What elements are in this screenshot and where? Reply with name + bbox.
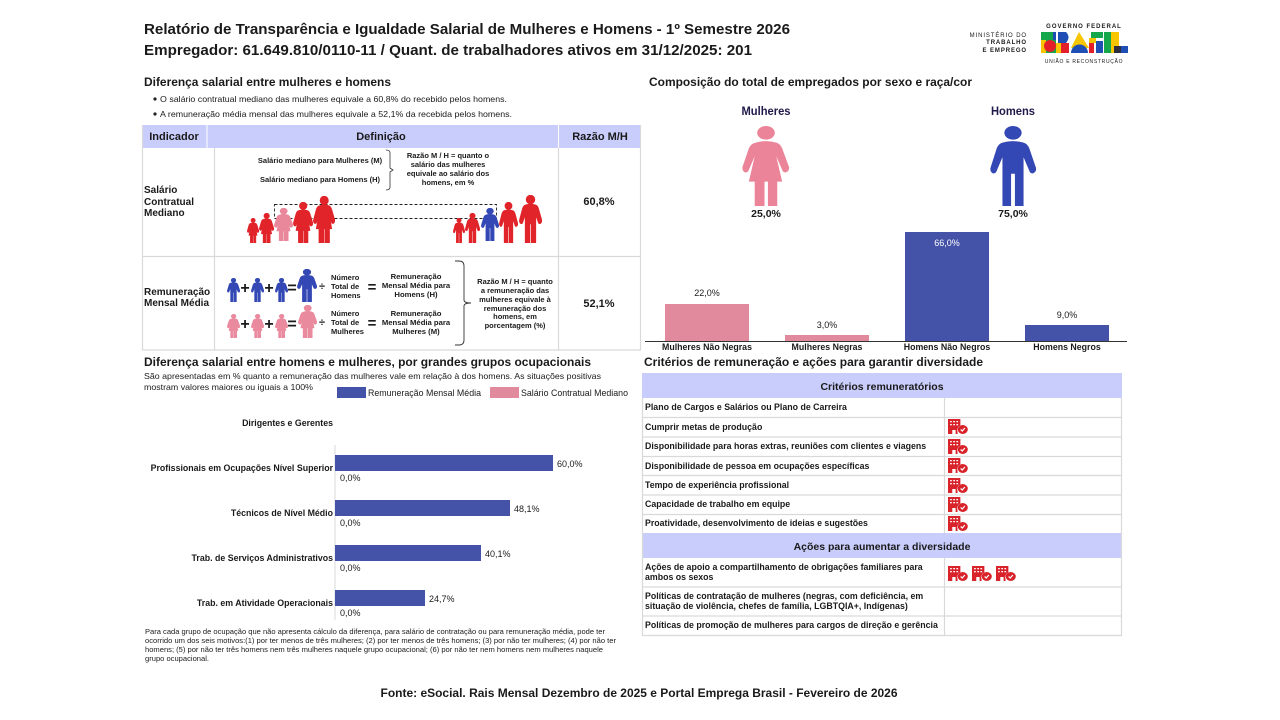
definition: salário mediano: salário das mulheres xyxy=(411,160,485,169)
bar chart: composição: Mulheres Não Negras xyxy=(662,342,752,352)
text block: explicação: São apresentadas em % quanto a remuneração das mulheres vale em relação à dos homens. As situações positivas xyxy=(144,371,601,381)
bar chart: grupos ocupacionais: 24,7% xyxy=(429,594,455,604)
formula: mulheres: ÷ xyxy=(319,317,325,329)
list: critérios: Disponibilidade para horas extras, reuniões com clientes e viagens xyxy=(645,441,926,451)
bar chart: grupos ocupacionais xyxy=(151,418,583,620)
footnote xyxy=(145,627,616,663)
list: ações: ambos os sexos xyxy=(645,572,714,582)
heading: critérios: Critérios de remuneração e ações para garantir diversidade xyxy=(644,355,983,369)
formula: homens: = xyxy=(368,279,377,296)
definition: salário mediano: Salário mediano para Mulheres (M) xyxy=(258,156,383,165)
list: ações: situação de violência, chefes de família, LGBTQIA+, Indígenas) xyxy=(645,601,908,611)
panel: mulheres xyxy=(742,106,790,220)
list: critérios: Disponibilidade de pessoa em ocupações específicas xyxy=(645,461,870,471)
bar chart: composição: Homens Negros xyxy=(1033,342,1101,352)
brace and definition: remuneração: Razão M / H = quanto xyxy=(477,277,553,286)
row label: Salário Contratual Mediano: Contratual xyxy=(144,197,194,208)
formula: mulheres: Número xyxy=(331,309,360,318)
bar chart: grupos ocupacionais: 0,0% xyxy=(340,563,361,573)
list: ações: Ações de apoio a compartilhamento de obrigações familiares para xyxy=(645,562,923,572)
panel: mulheres: 25,0% xyxy=(751,208,782,220)
icons: ações xyxy=(948,566,1016,581)
formula: homens: = xyxy=(287,280,297,297)
logo: Ministério do Trabalho e Emprego: TRABALHO xyxy=(986,40,1027,46)
formula: mulheres: + xyxy=(264,316,274,333)
list: critérios: Plano de Cargos e Salários ou Plano de Carreira xyxy=(645,402,847,412)
bar chart: grupos ocupacionais: Trab. de Serviços Administrativos xyxy=(192,553,333,563)
bar chart: grupos ocupacionais: Trab. em Atividade Operacionais xyxy=(197,598,333,608)
definition: salário mediano xyxy=(258,150,490,190)
legend: Remuneração Mensal Média xyxy=(368,388,482,399)
heading: diferença por grupos ocupacionais: Diferença salarial entre homens e mulheres, por grandes grupos ocupacionais xyxy=(144,355,591,369)
title: Relatório de Transparência e Igualdade Salarial de Mulheres e Homens - 1º Semestre 2026 xyxy=(144,22,790,38)
formula: mulheres: + xyxy=(240,316,250,333)
footnote: ocorrido um dos seis motivos:(1) por ter menos de três mulheres; (2) por ter menos de três homens; (3) por não ter mulheres; (4) por não ter xyxy=(145,636,616,645)
list: critérios: Proatividade, desenvolvimento de ideias e sugestões xyxy=(645,518,868,528)
text block: explicação xyxy=(144,371,601,392)
panel: homens xyxy=(990,106,1036,220)
source: Fonte: eSocial. Rais Mensal Dezembro de 2025 e Portal Emprega Brasil - Fevereiro de 2026 xyxy=(380,688,898,700)
formula: mulheres: Total de xyxy=(331,318,359,327)
definition: salário mediano: equivale ao salário dos xyxy=(407,169,489,178)
list: ações: Políticas de contratação de mulheres (negras, com deficiência, em xyxy=(645,591,923,601)
bar chart: composição: Homens Não Negros xyxy=(904,342,990,352)
bar chart: composição: Mulheres Negras xyxy=(792,342,863,352)
formula: homens: Número xyxy=(331,273,360,282)
definition: salário mediano: homens, em % xyxy=(422,178,475,187)
panel: tabela de indicadores xyxy=(142,125,640,350)
icons: grupo de mulheres xyxy=(247,197,335,243)
bar chart: grupos ocupacionais: Dirigentes e Gerentes xyxy=(242,418,333,428)
formula: homens: Total de xyxy=(331,282,359,291)
bar chart: composição: 9,0% xyxy=(1057,310,1077,320)
bar chart: composição: 3,0% xyxy=(817,320,837,330)
bar chart: grupos ocupacionais: 0,0% xyxy=(340,473,361,483)
text block: bullets: O salário contratual mediano das mulheres equivale a 60,8% do recebido pelos homens. xyxy=(160,94,507,104)
bar chart: composição: 22,0% xyxy=(694,288,720,298)
logo: Ministério do Trabalho e Emprego: E EMPREGO xyxy=(983,48,1027,54)
panel: mulheres: Mulheres xyxy=(742,106,790,118)
value: 52,1%: 52,1% xyxy=(583,298,615,310)
table header: Indicador xyxy=(149,131,199,143)
row label: Salário Contratual Mediano: Salário xyxy=(144,185,177,196)
footnote: homens; (5) por não ter três homens nem três mulheres naquele grupo ocupacional; (6) por não ter nem homens nem mulheres naquele xyxy=(145,645,603,654)
list: ações xyxy=(645,562,938,630)
formula: homens: ÷ xyxy=(319,281,325,293)
footnote: grupo ocupacional. xyxy=(145,654,209,663)
formula: homens: + xyxy=(264,280,274,297)
formula: homens: Homens (H) xyxy=(394,290,438,299)
table header: Razão M/H xyxy=(572,131,628,143)
text block: explicação: mostram valores maiores ou iguais a 100% xyxy=(144,382,313,392)
list: critérios xyxy=(645,402,926,528)
formula: homens: Homens xyxy=(331,291,361,300)
list: critérios: Cumprir metas de produção xyxy=(645,422,763,432)
bar chart: composição xyxy=(645,232,1127,352)
table header xyxy=(149,131,628,143)
bar chart: grupos ocupacionais: 40,1% xyxy=(485,549,511,559)
formula: mulheres xyxy=(227,305,451,338)
formula: homens: Remuneração xyxy=(391,272,442,281)
brace and definition: remuneração: homens, em xyxy=(493,312,537,321)
formula: mulheres: Remuneração xyxy=(391,309,442,318)
formula: mulheres: Mulheres xyxy=(331,327,364,336)
header: critérios remuneratórios: Critérios remuneratórios xyxy=(820,381,944,393)
formula: mulheres: Mensal Média para xyxy=(382,318,451,327)
brace and definition: remuneração: a remuneração das xyxy=(481,286,549,295)
brace and definition: remuneração xyxy=(455,261,553,345)
row label: Salário Contratual Mediano: Mediano xyxy=(144,208,185,219)
formula: mulheres: = xyxy=(287,316,297,333)
text block: bullets: A remuneração média mensal das mulheres equivale a 52,1% da recebida pelos homens. xyxy=(160,109,512,119)
title xyxy=(144,22,790,59)
row label: Remuneração Mensal Média: Remuneração xyxy=(144,287,210,298)
brace and definition: remuneração: mulheres equivale à xyxy=(479,295,552,304)
definition: salário mediano: Razão M / H = quanto o xyxy=(407,151,490,160)
bar chart: grupos ocupacionais: 0,0% xyxy=(340,518,361,528)
text block: bullets xyxy=(153,94,512,119)
formula: mulheres: Mulheres (M) xyxy=(392,327,440,336)
bar chart: grupos ocupacionais: 0,0% xyxy=(340,608,361,618)
icons: grupo de homens xyxy=(453,196,542,243)
formula: homens xyxy=(227,269,451,302)
logo: Governo Federal Brasil xyxy=(1041,24,1128,65)
title: Empregador: 61.649.810/0110-11 / Quant. de trabalhadores ativos em 31/12/2025: 201 xyxy=(144,43,752,59)
panel: homens: 75,0% xyxy=(998,208,1029,220)
panel: homens: Homens xyxy=(991,106,1035,118)
heading: diferença salarial: Diferença salarial entre mulheres e homens xyxy=(144,75,391,89)
formula: homens: + xyxy=(240,280,250,297)
row label: Remuneração Mensal Média: Mensal Média xyxy=(144,298,209,309)
logo: Governo Federal Brasil: GOVERNO FEDERAL xyxy=(1046,24,1122,30)
list: critérios: Capacidade de trabalho em equipe xyxy=(645,499,790,509)
bar chart: composição: 66,0% xyxy=(934,238,960,248)
legend xyxy=(337,387,628,399)
icons: empresa xyxy=(948,419,968,531)
logo: Governo Federal Brasil: UNIÃO E RECONSTRUÇÃO xyxy=(1045,58,1123,65)
brace and definition: remuneração: remuneração dos xyxy=(484,304,546,313)
bar chart: grupos ocupacionais: Profissionais em Ocupações Nível Superior xyxy=(151,463,334,473)
panel: critérios e ações xyxy=(642,373,1122,636)
footnote: Para cada grupo de ocupação que não apresenta cálculo da diferença, para salário de contratação ou para remuneração média, pode ter xyxy=(145,627,605,636)
value: 60,8%: 60,8% xyxy=(583,196,615,208)
row label: Remuneração Mensal Média xyxy=(144,287,210,309)
header: ações: Ações para aumentar a diversidade xyxy=(794,541,971,553)
legend: Salário Contratual Mediano xyxy=(521,388,628,399)
brace and definition: remuneração: porcentagem (%) xyxy=(485,321,546,330)
dashed box xyxy=(274,204,496,218)
bar chart: grupos ocupacionais: 60,0% xyxy=(557,459,583,469)
list: critérios: Tempo de experiência profissional xyxy=(645,480,789,490)
list: ações: Políticas de promoção de mulheres para cargos de direção e gerência xyxy=(645,620,938,630)
logo: Ministério do Trabalho e Emprego: MINISTÉRIO DO xyxy=(970,32,1027,39)
bar chart: grupos ocupacionais: Técnicos de Nível Médio xyxy=(231,508,334,518)
row label: Salário Contratual Mediano xyxy=(144,185,194,219)
logo: Ministério do Trabalho e Emprego xyxy=(970,32,1027,54)
formula: mulheres: = xyxy=(368,315,377,332)
bar chart: grupos ocupacionais: 48,1% xyxy=(514,504,540,514)
table header: Definição xyxy=(356,131,406,143)
definition: salário mediano: Salário mediano para Homens (H) xyxy=(260,175,381,184)
heading: composição: Composição do total de empregados por sexo e raça/cor xyxy=(649,75,972,89)
formula: homens: Mensal Média para xyxy=(382,281,451,290)
